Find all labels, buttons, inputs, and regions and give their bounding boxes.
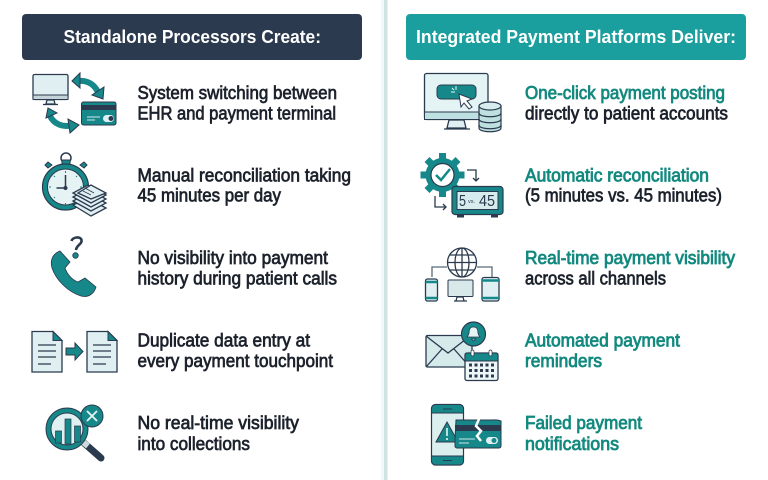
text: manual reconciliation [138,166,351,206]
text: one-click payment posting [525,83,728,124]
text: no visibility into payment history [138,248,337,288]
text: one-click payment posting: One-click payment posting [525,83,725,103]
text: real-time payment visibility [525,248,735,288]
text: system switching [138,83,337,124]
panel: integrated payment platforms [406,14,746,465]
icon: duplicate documents [32,332,117,372]
text: no real-time visibility: into collections [138,434,250,454]
text: system switching: EHR and payment terminal [138,104,336,124]
text: failed payment notifications [525,413,642,454]
heading: standalone processors create [22,14,362,60]
heading: integrated platforms deliver: Integrated Payment Platforms Deliver: [416,27,736,47]
text: no visibility into payment history: No visibility into payment [138,248,328,268]
heading: integrated platforms deliver [406,14,746,60]
icon: phone with question mark [51,237,96,297]
heading: standalone processors create: Standalone Processors Create: [64,27,321,47]
icon: gear, check and timer: 45 [479,193,495,210]
icon: one-click monitor and database [424,74,501,132]
icon: gear, check and timer [420,153,503,218]
text: no visibility into payment history: history during patient calls [138,268,337,288]
text: one-click payment posting: directly to patient accounts [525,104,728,124]
text: automatic reconciliation: (5 minutes vs. 45 minutes) [525,186,722,206]
icon: gear, check and timer: 5 [459,193,466,210]
text: duplicate data entry [138,330,333,371]
text: system switching: System switching between [138,83,337,103]
text: failed payment notifications: notifications [525,434,619,454]
text: automatic reconciliation: Automatic reconciliation [525,166,709,186]
text: duplicate data entry: every payment touchpoint [138,351,333,371]
text: automated payment reminders [525,330,680,371]
icon: magnifier over bar chart [46,405,103,458]
text: automatic reconciliation [525,166,722,206]
text: real-time payment visibility: across all channels [525,268,666,288]
text: manual reconciliation: Manual reconciliation taking [138,166,351,186]
text: duplicate data entry: Duplicate data entry at [138,330,310,350]
text: manual reconciliation: 45 minutes per day [138,186,281,206]
icon: envelope, bell and calendar [426,322,498,380]
icon: monitor and card switching [33,73,116,133]
icon: globe connected to devices [426,248,499,301]
icon: stopwatch and paper stack [42,153,106,216]
text: failed payment notifications: Failed payment [525,413,642,433]
panel: standalone processors [22,14,362,458]
text: no real-time visibility: No real-time visibility [138,413,299,433]
text: real-time payment visibility: Real-time payment visibility [525,248,735,268]
icon: gear, check and timer: vs. [468,199,476,205]
icon: phone alert and broken card [432,404,501,465]
text: no real-time visibility [138,413,299,454]
text: automated payment reminders: reminders [525,351,602,371]
text: automated payment reminders: Automated payment [525,330,680,350]
